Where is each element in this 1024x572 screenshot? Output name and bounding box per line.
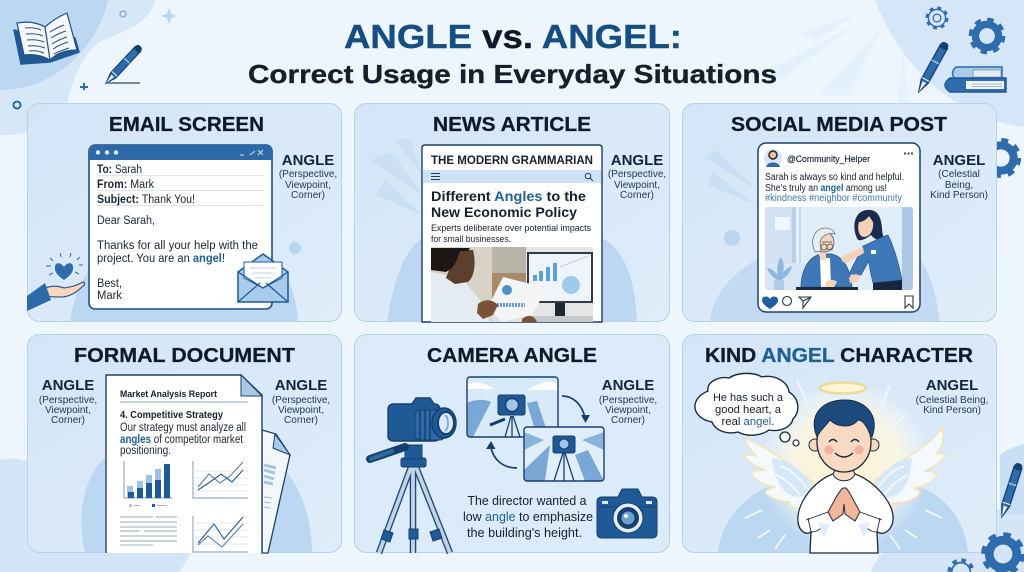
label [930, 152, 988, 201]
caption: low angle to emphasize [463, 509, 593, 524]
label [599, 377, 657, 426]
label left [39, 377, 97, 426]
icon: pen [103, 44, 143, 86]
icon: small gear [927, 8, 947, 28]
label: ANGEL [926, 377, 978, 394]
document page: angles of competitor market [120, 434, 244, 446]
email window: project. You are an angel! [97, 253, 225, 265]
label: ANGLE [282, 152, 334, 169]
panel: kind angel character [682, 334, 997, 553]
frame: low angle [524, 427, 604, 481]
line chart [193, 516, 248, 552]
caption: The director wanted a [468, 493, 587, 508]
icon: side gear [984, 141, 1018, 175]
label [608, 152, 666, 201]
icon: camera [597, 489, 657, 538]
wings [745, 427, 945, 510]
heading: KIND ANGEL CHARACTER [705, 345, 974, 367]
panel: email screen [27, 103, 342, 322]
label left: ANGLE [42, 377, 94, 394]
icon: large gear [971, 20, 1003, 52]
heading: FORMAL DOCUMENT [74, 345, 295, 367]
email window: To: Sarah [97, 164, 142, 176]
label: Corner) [620, 190, 654, 201]
post card: #kindness #neighbor #community [765, 193, 902, 204]
title [248, 18, 777, 89]
heading: CAMERA ANGLE [427, 345, 597, 367]
caption [463, 493, 593, 540]
panel: formal document [27, 334, 342, 553]
icons: like comment share save [762, 296, 778, 309]
label: Corner) [291, 190, 325, 201]
post card: She's truly an angel among us! [765, 183, 887, 194]
post card: Sarah is always so kind and helpful. [765, 172, 904, 183]
email window: Dear Sarah, [97, 215, 155, 227]
halo [820, 382, 866, 394]
label: Viewpoint, [605, 405, 651, 416]
label: Kind Person) [923, 405, 981, 416]
post card [758, 143, 920, 312]
news page: New Economic Policy [431, 204, 577, 220]
document page: Our strategy must analyze all [120, 422, 246, 434]
document page: 4. Competitive Strategy [120, 410, 223, 421]
heading: SOCIAL MEDIA POST [731, 114, 947, 136]
label left: Corner) [51, 415, 85, 426]
email window: Subject: Thank You! [97, 194, 195, 206]
photo [431, 247, 593, 322]
illustration: helper and elder [765, 207, 913, 290]
heading: NEWS ARTICLE [433, 114, 591, 136]
email window: From: Mark [97, 179, 154, 191]
label [279, 152, 337, 201]
speech bubble [695, 373, 799, 446]
label: Kind Person) [930, 190, 988, 201]
label right: Viewpoint, [278, 405, 324, 416]
icon: pen bottom right [998, 462, 1023, 518]
label: (Perspective, [608, 169, 666, 180]
label: Viewpoint, [614, 180, 660, 191]
label: ANGLE [602, 377, 654, 394]
label right [272, 377, 330, 426]
label: (Celestial [938, 169, 980, 180]
label: Corner) [611, 415, 645, 426]
label: Viewpoint, [285, 180, 331, 191]
label: Being, [945, 180, 973, 191]
speech bubble: good heart, a [715, 404, 782, 416]
news page: Experts deliberate over potential impacts [431, 223, 591, 233]
email window [89, 145, 272, 309]
news page: Different Angles to the [431, 188, 586, 204]
news page: THE MODERN GRAMMARIAN [431, 153, 593, 167]
news page: for small businesses. [431, 234, 511, 244]
label: ANGEL [933, 152, 985, 169]
arrow: up [486, 441, 517, 468]
arrow: down [562, 396, 590, 423]
label: (Celestial Being, [916, 395, 988, 406]
angel body [798, 468, 893, 553]
frame: high angle [467, 377, 558, 437]
email window: Mark [97, 290, 122, 302]
label right: ANGLE [275, 377, 327, 394]
label right: Corner) [284, 415, 318, 426]
label left: Viewpoint, [45, 405, 91, 416]
title: Correct Usage in Everyday Situations [248, 59, 777, 89]
label [916, 377, 988, 416]
panel: social media post [682, 103, 997, 322]
label: ANGLE [611, 152, 663, 169]
text lines [120, 517, 177, 545]
document page: positioning. [120, 445, 171, 457]
caption: the building's height. [467, 525, 582, 540]
light rays [745, 380, 942, 549]
news page [422, 145, 602, 322]
decorative icons top left [14, 8, 177, 108]
email window: Best, [97, 278, 122, 290]
label: (Perspective, [599, 395, 657, 406]
panel: camera angle [354, 334, 670, 553]
document page: Market Analysis Report [120, 389, 218, 400]
back page [262, 430, 290, 553]
line chart [193, 461, 248, 498]
label right: (Perspective, [272, 395, 330, 406]
panel: news article [354, 103, 670, 322]
label left: (Perspective, [39, 395, 97, 406]
label: (Perspective, [279, 169, 337, 180]
angel head [809, 400, 879, 472]
icon: pen right [915, 41, 950, 94]
title: ANGLE vs. ANGEL: [344, 18, 682, 55]
icon: books [945, 67, 1006, 92]
heading: EMAIL SCREEN [109, 114, 264, 136]
icon: envelope [238, 254, 288, 302]
post card: @Community_Helper [787, 154, 870, 165]
document page [106, 375, 262, 553]
speech bubble: real angel. [722, 416, 774, 428]
icon: gears bottom right [949, 535, 1022, 572]
icon: open book [14, 13, 79, 64]
icon: hand and heart [27, 253, 84, 311]
email window: Thanks for all your help with the [97, 240, 258, 252]
decorative icons top right [915, 8, 1018, 175]
bar chart [124, 461, 172, 507]
icon: camera on tripod [370, 398, 456, 553]
speech bubble: He has such a [713, 392, 784, 404]
